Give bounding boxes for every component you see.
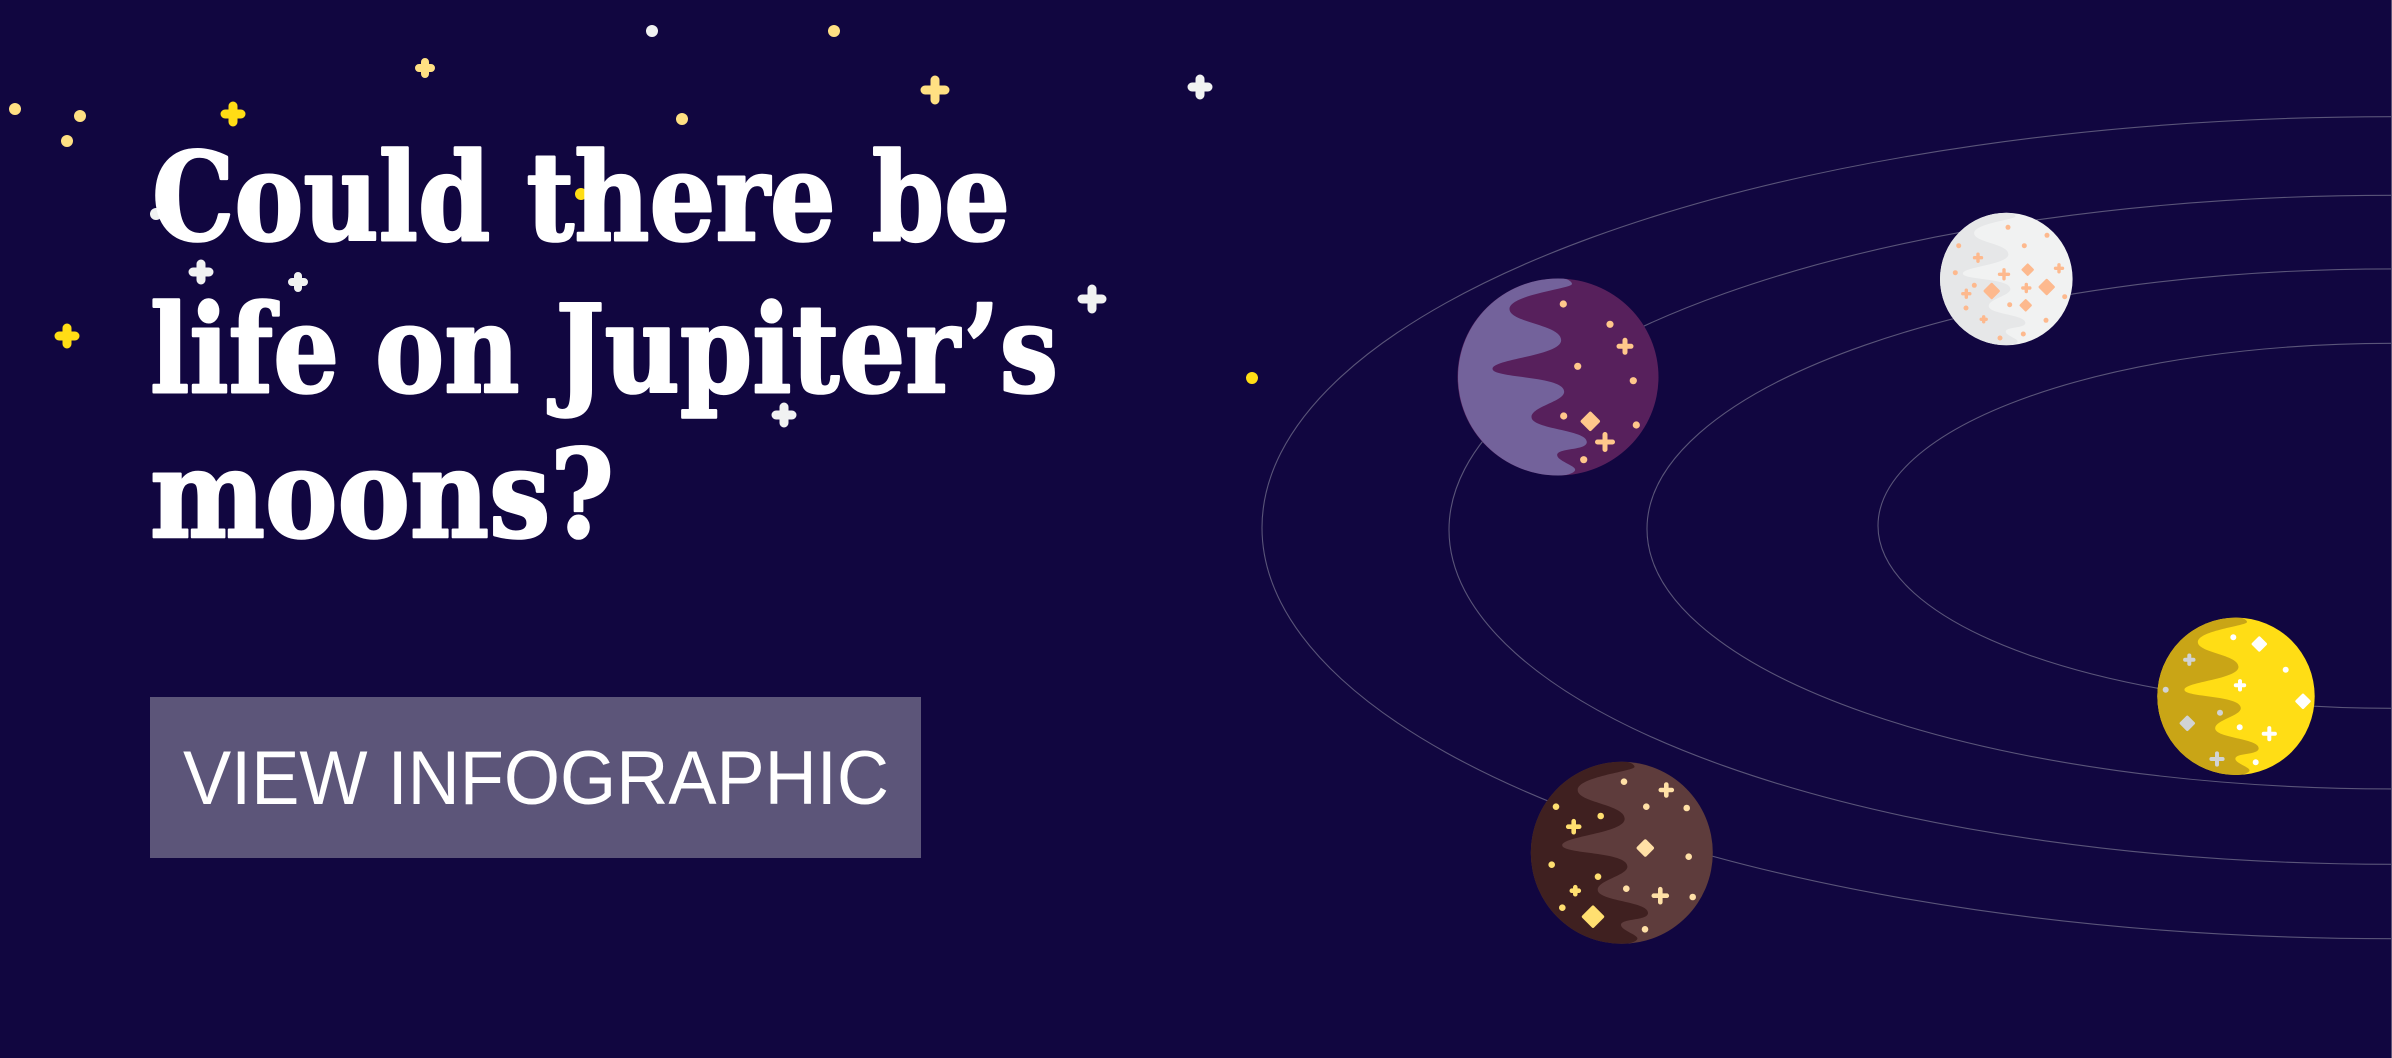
planet: brown moon xyxy=(1527,762,1713,944)
orbit lines xyxy=(1262,117,2392,939)
planet: white moon xyxy=(1937,213,2073,345)
planet: purple moon xyxy=(1454,278,1658,476)
button: view infographic: VIEW INFOGRAPHIC xyxy=(183,736,889,821)
title xyxy=(150,125,1058,566)
title: moons? xyxy=(150,422,614,566)
starfield xyxy=(9,25,1258,423)
planet: yellow moon xyxy=(2154,618,2315,775)
title: Could there be xyxy=(152,125,1010,269)
title: life on Jupiter’s xyxy=(150,277,1058,421)
button: view infographic xyxy=(150,697,921,858)
